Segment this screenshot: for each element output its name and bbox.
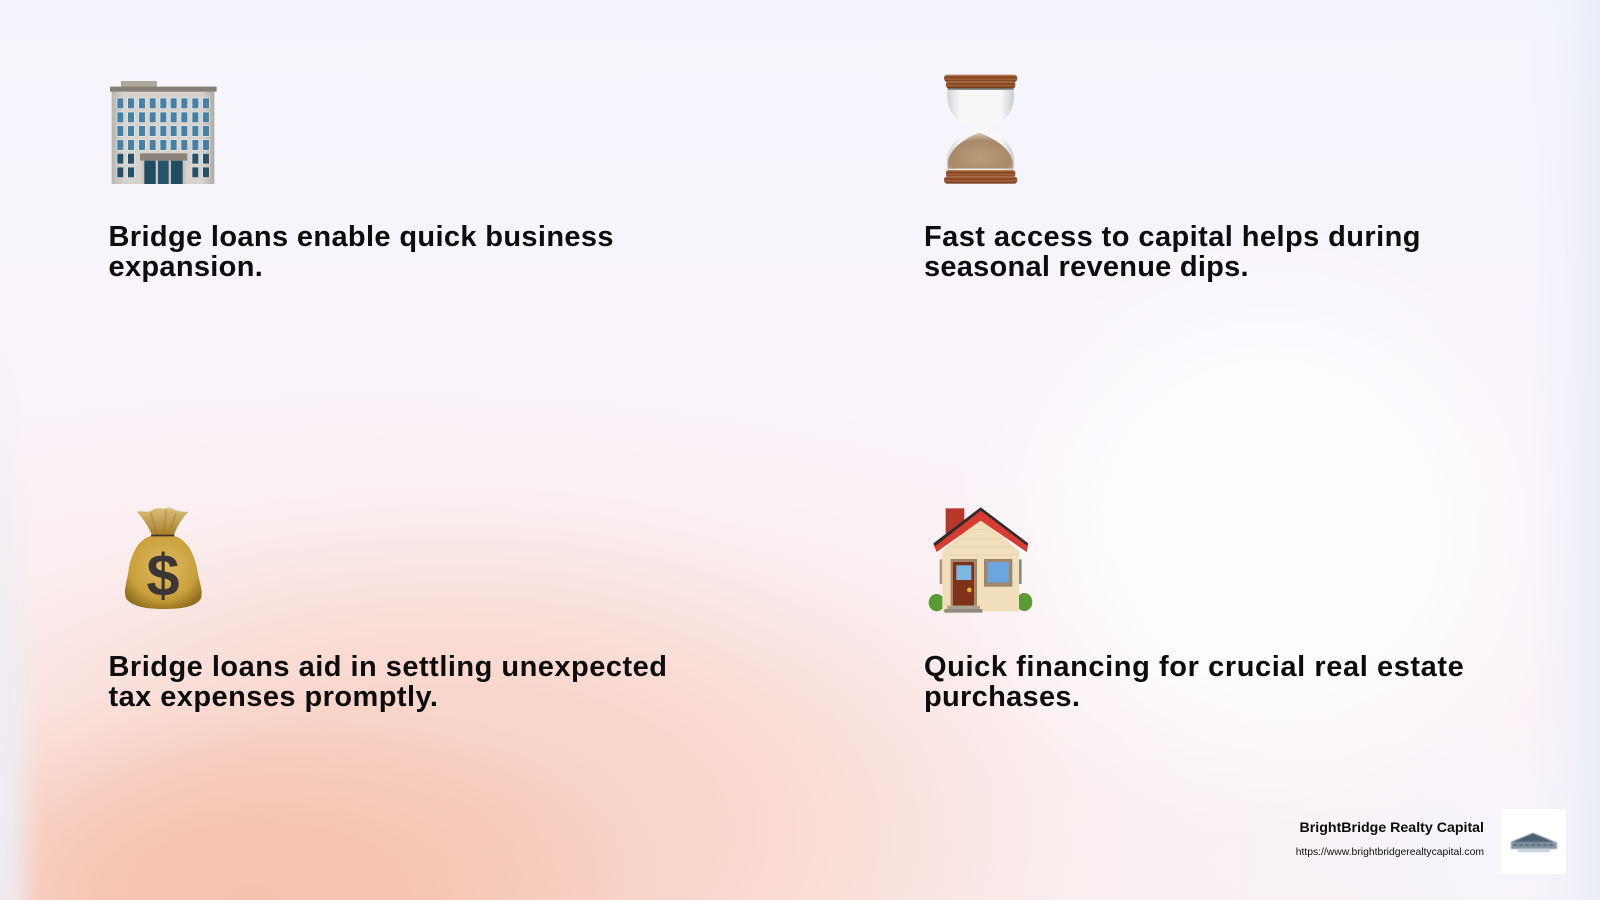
- icon: house: [928, 507, 1032, 613]
- text: tax expenses: [108, 651, 667, 713]
- text: bridge loans enable expansion: Bridge loans enable quick business: [108, 221, 614, 253]
- text: tax expenses: tax expenses promptly.: [108, 681, 438, 713]
- icon: money bag: $: [146, 541, 180, 608]
- text: fast access to capital: seasonal revenue dips.: [924, 251, 1249, 283]
- icon: office building: [110, 81, 217, 184]
- icon: hourglass: [944, 74, 1018, 184]
- text: real estate purchases: Quick financing for crucial real estate: [924, 651, 1464, 683]
- text: tax expenses: Bridge loans aid in settling unexpected: [108, 651, 667, 683]
- icon: money bag: [125, 507, 202, 609]
- text: fast access to capital: [924, 221, 1421, 283]
- text: fast access to capital: Fast access to capital helps during: [924, 221, 1421, 253]
- footer url: https://www.brightbridgerealtycapital.com: [1296, 847, 1484, 858]
- text: real estate purchases: purchases.: [924, 681, 1080, 713]
- text: bridge loans enable expansion: expansion.: [108, 251, 263, 283]
- text: bridge loans enable expansion: [108, 221, 614, 283]
- text: real estate purchases: [924, 651, 1464, 713]
- logo card: [1501, 809, 1566, 874]
- footer brand name: BrightBridge Realty Capital: [1300, 820, 1484, 836]
